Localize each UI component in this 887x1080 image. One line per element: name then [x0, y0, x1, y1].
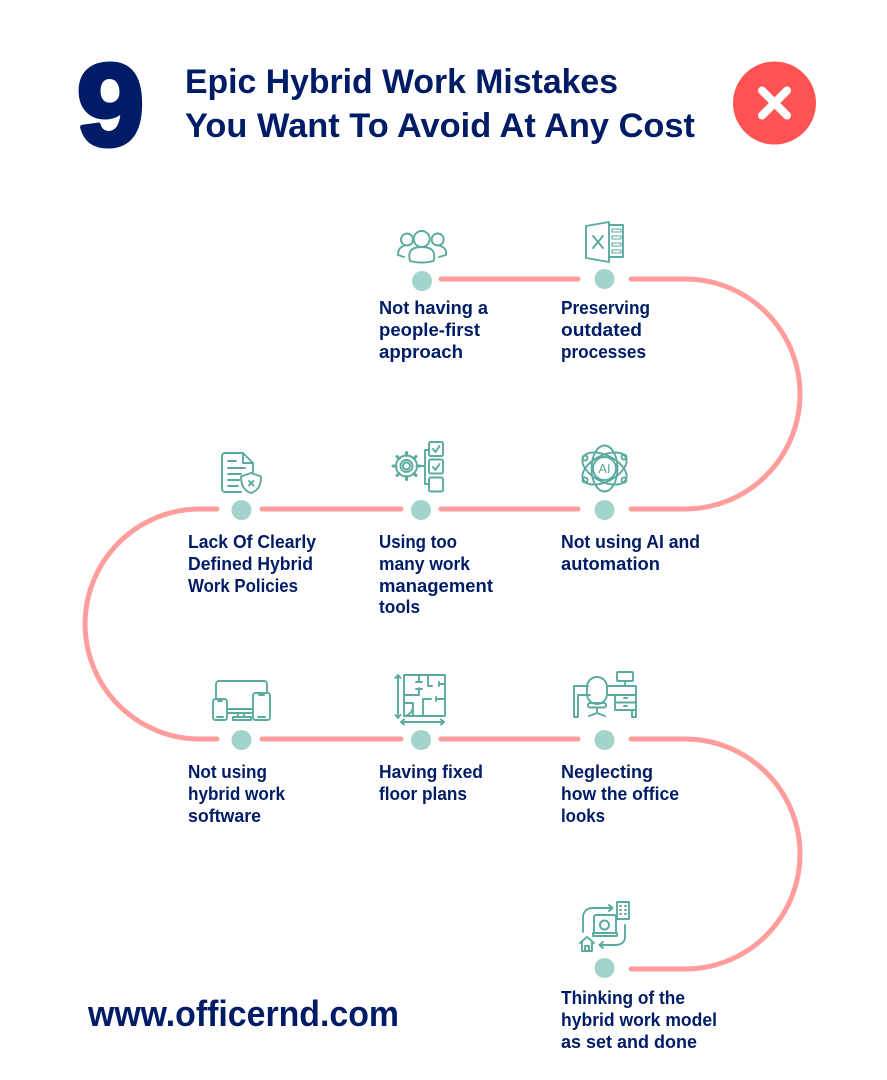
- label: [561, 988, 717, 1052]
- icon: red cross badge: [733, 62, 816, 144]
- step 1: people-first: [379, 231, 489, 362]
- icon: monitor, tablet and phone: [213, 681, 270, 720]
- label: how the office: [561, 784, 679, 804]
- marker dot: [594, 958, 614, 978]
- label: approach: [379, 342, 463, 362]
- marker dot: [411, 730, 431, 750]
- label: [561, 532, 700, 574]
- icon: laptop, building and home cycle: [580, 902, 629, 951]
- label: Lack Of Clearly: [188, 532, 316, 552]
- label: [379, 532, 493, 617]
- icon: gear with checklist: [393, 442, 443, 492]
- title: Epic Hybrid Work Mistakes: [185, 63, 618, 101]
- step 3: AI and automation: [561, 446, 700, 574]
- label: as set and done: [561, 1032, 697, 1052]
- label: people-first: [379, 320, 480, 340]
- label: Defined Hybrid: [188, 554, 313, 574]
- label: [561, 298, 650, 362]
- step 2: outdated processes: [561, 222, 650, 362]
- label: [379, 298, 489, 362]
- marker dot: [411, 500, 431, 520]
- title: You Want To Avoid At Any Cost: [185, 107, 695, 145]
- step 8: office looks: [561, 672, 679, 826]
- label: [561, 762, 679, 826]
- label: software: [188, 806, 261, 826]
- label: many work: [379, 554, 471, 574]
- label: hybrid work model: [561, 1010, 717, 1030]
- step 4: too many tools: [379, 442, 493, 617]
- title: [185, 63, 695, 145]
- icon: office desk and chair: [574, 672, 636, 717]
- label: outdated: [561, 320, 642, 340]
- label: Having fixed: [379, 762, 483, 782]
- label: Work Policies: [188, 576, 298, 596]
- label: looks: [561, 806, 605, 826]
- marker dot: [594, 730, 614, 750]
- step 7: fixed floor plans: [379, 675, 483, 804]
- icon: spreadsheet file: [586, 222, 623, 262]
- step 5: policies: [188, 453, 316, 596]
- icon: AI atom: [577, 446, 632, 492]
- winding path connector: [85, 279, 800, 969]
- label: Not using AI and: [561, 532, 700, 552]
- icon: floor plan: [396, 675, 445, 724]
- label: hybrid work: [188, 784, 286, 804]
- label: [188, 762, 286, 826]
- label: Using too: [379, 532, 457, 552]
- label: Neglecting: [561, 762, 653, 782]
- website url: www.officernd.com: [87, 993, 399, 1034]
- label: processes: [561, 342, 646, 362]
- label: floor plans: [379, 784, 467, 804]
- marker dot: [594, 500, 614, 520]
- marker dot: [232, 730, 252, 750]
- icon: document with shield: [222, 453, 261, 493]
- label: automation: [561, 554, 660, 574]
- marker dot: [594, 269, 614, 289]
- label: management: [379, 576, 493, 596]
- marker dot: [412, 271, 432, 291]
- label: [188, 532, 316, 596]
- label: Thinking of the: [561, 988, 685, 1008]
- big number 9: 9: [77, 40, 144, 170]
- step 9: set and done: [561, 902, 717, 1052]
- icon text: AI: AI: [598, 461, 611, 476]
- marker dot: [232, 500, 252, 520]
- step 6: hybrid work software: [188, 681, 286, 826]
- label: Preserving: [561, 298, 650, 318]
- icon: people group: [398, 231, 446, 262]
- label: tools: [379, 597, 420, 617]
- label: Not having a: [379, 298, 489, 318]
- label: Not using: [188, 762, 267, 782]
- label: [379, 762, 483, 804]
